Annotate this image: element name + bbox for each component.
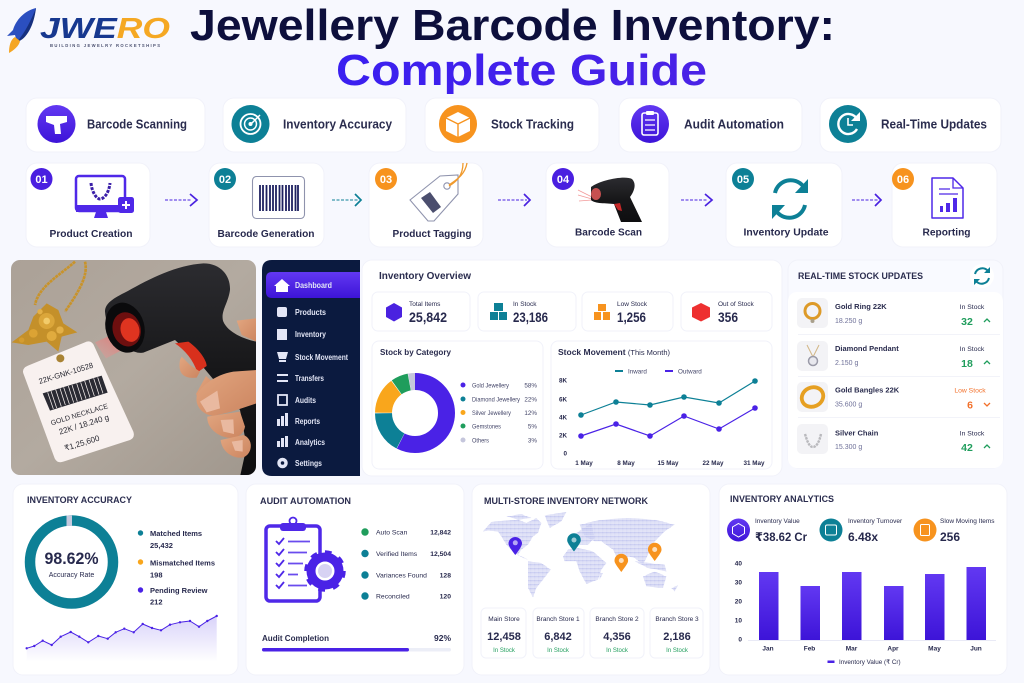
axis labels: 2K (559, 432, 567, 440)
y axis labels: 10 (735, 618, 742, 624)
fingers holding the grip (179, 357, 257, 458)
axis labels: 31 May (743, 460, 765, 467)
arrow (852, 194, 881, 206)
row: Silver Chain: In Stock (960, 430, 985, 438)
scanner lens (105, 302, 145, 353)
stat: Slow Moving Items (914, 518, 995, 544)
step 03: Product Tagging: Product Tagging (392, 228, 472, 240)
store: Branch Store 3 (650, 608, 703, 658)
hand-held scanner (100, 263, 257, 477)
pill: Inventory Accuracy (223, 98, 406, 152)
row: Diamond Pendant: In Stock (960, 346, 985, 353)
stat: Inventory Value: ₹38.62 Cr (755, 530, 807, 544)
pill: Real-Time Updates: Real-Time Updates (881, 118, 987, 132)
row: Gold Bangles 22K (797, 376, 1000, 412)
stat: Slow Moving Items: Slow Moving Items (940, 518, 995, 525)
store: Branch Store 1 (533, 608, 584, 658)
step 02: Barcode Generation: Barcode Generation (218, 228, 314, 240)
stat: Total Items: 25,842 (409, 310, 447, 325)
heading: Stock Movement (This Month) (558, 347, 671, 357)
step 05: Inventory Update: Inventory Update (744, 226, 829, 238)
step 06: Reporting (892, 163, 997, 247)
store: Branch Store 1: In Stock (547, 648, 570, 654)
heading: INVENTORY ANALYTICS (730, 494, 834, 504)
menu: Inventory (277, 329, 327, 340)
price tag (23, 341, 134, 462)
x axis labels: Jun (970, 646, 982, 652)
menu: Stock Movement (277, 352, 348, 362)
panel: stock movement chart (551, 341, 772, 469)
y axis labels: 20 (735, 598, 742, 606)
stat: Inventory Turnover (820, 518, 903, 544)
step 05: Inventory Update: 05 (737, 174, 749, 186)
brand tagline: BUILDING JEWELRY ROCKETSHIPS (50, 43, 160, 48)
photo: barcode scanner reading jewellery tag (11, 260, 257, 477)
donut legend (460, 382, 537, 444)
accuracy legend: Mismatched Items (150, 558, 215, 568)
row: Gold Bangles 22K: 6 (967, 400, 973, 412)
store: Branch Store 1: Branch Store 1 (536, 616, 580, 623)
row: Silver Chain: 15.300 g (835, 444, 862, 451)
scanner body (105, 263, 257, 477)
accuracy legend: 212 (150, 598, 163, 606)
step 01: Product Creation: Product Creation (50, 228, 132, 240)
step 03: Product Tagging: 03 (380, 174, 392, 186)
store: Branch Store 3: 2,186 (663, 631, 691, 643)
axis labels: 0 (563, 450, 567, 458)
row: Gold Ring 22K (797, 298, 990, 328)
row: Gold Bangles 22K: Gold Bangles 22K (835, 386, 900, 394)
active item: Dashboard: Dashboard (295, 281, 332, 290)
stat: Low Stock: Low Stock (617, 301, 648, 308)
accuracy ring: Accuracy Rate (49, 572, 94, 579)
y axis labels (735, 560, 742, 644)
audit list: 12,504 (430, 551, 451, 558)
menu: Stock Movement: Stock Movement (295, 353, 348, 362)
accuracy legend: 25,432 (150, 541, 173, 550)
store: Branch Store 2: Branch Store 2 (595, 616, 639, 623)
process steps row (26, 163, 997, 247)
pill: Real-Time Updates (820, 98, 1001, 152)
pill: Inventory Accuracy: Inventory Accuracy (283, 118, 392, 132)
arrow (332, 194, 361, 206)
chart legend: Inventory Value (₹ Cr) (839, 659, 901, 666)
row: Gold Bangles 22K: 35.600 g (835, 402, 862, 408)
x axis labels (762, 646, 982, 652)
heading: Inventory Overview (379, 270, 472, 282)
step 03: Product Tagging (369, 163, 483, 247)
row: Gold Bangles 22K: Low Stock (954, 388, 986, 394)
accuracy legend: Pending Review (150, 586, 208, 595)
title line 1: Jewellery Barcode Inventory: (190, 1, 835, 50)
audit list: Variances Found (376, 572, 427, 580)
donut legend: 3% (528, 438, 537, 444)
row: Silver Chain: 42 (961, 442, 973, 454)
heading: AUDIT AUTOMATION (260, 496, 351, 506)
stat: Out of Stock: Out of Stock (718, 301, 755, 308)
menu: Products: Products (295, 308, 327, 317)
axis labels: 8 May (617, 460, 635, 467)
pill: Barcode Scanning: Barcode Scanning (87, 118, 187, 132)
logo: JWERO (7, 8, 171, 53)
axis labels: 8K (559, 378, 567, 384)
step 04: Barcode Scan (546, 163, 669, 247)
panel: real-time stock updates (788, 260, 1003, 468)
row: Gold Ring 22K: In Stock (960, 304, 985, 311)
y axis labels: 30 (735, 580, 742, 586)
panel: audit automation (246, 484, 464, 675)
accuracy legend (138, 529, 215, 606)
pill: Audit Automation: Audit Automation (684, 118, 784, 132)
menu: Analytics: Analytics (295, 438, 326, 447)
audit list: Auto Scan (376, 530, 408, 536)
stat: Inventory Value (727, 518, 807, 544)
gold necklace chain (35, 262, 86, 312)
row: Gold Ring 22K: 18.250 g (835, 318, 862, 325)
panel: inventory analytics (719, 484, 1007, 675)
pill: Barcode Scanning (26, 98, 205, 152)
x axis labels: Jan (762, 646, 774, 652)
store: Branch Store 2 (590, 608, 644, 658)
stat: In Stock: 23,186 (513, 310, 548, 325)
x axis labels: Feb (804, 646, 815, 652)
audit list: 120 (440, 594, 451, 600)
active item: Dashboard (266, 272, 360, 298)
step 04: Barcode Scan: 04 (557, 174, 570, 186)
row: Gold Ring 22K: 32 (961, 316, 973, 328)
x axis labels: Mar (846, 646, 858, 652)
legend: Inward (628, 368, 647, 376)
audit completion progress: 92% (434, 633, 451, 643)
menu: Transfers (277, 374, 325, 383)
heading: REAL-TIME STOCK UPDATES (798, 271, 923, 281)
icon: refresh (970, 264, 994, 288)
store: Branch Store 2: 4,356 (603, 631, 631, 643)
row: Silver Chain: Silver Chain (835, 428, 879, 438)
price tag: 22K-GNK-10528 (38, 361, 94, 386)
x axis labels: May (928, 646, 941, 652)
store: Branch Store 3: In Stock (666, 648, 689, 654)
arrow (498, 194, 530, 206)
step 05: Inventory Update (726, 163, 842, 247)
axis labels: 4K (559, 414, 567, 422)
row: Diamond Pendant (797, 334, 1000, 371)
panel: inventory accuracy (13, 484, 238, 675)
y axis labels: 0 (738, 636, 742, 644)
audit completion progress (262, 633, 451, 652)
accuracy ring: 98.62% (44, 549, 98, 568)
store: Main Store: Main Store (488, 616, 520, 623)
bar chart (735, 560, 996, 666)
step 06: Reporting: Reporting (922, 226, 970, 238)
row: Silver Chain (797, 418, 1000, 454)
audit list: Verified Items (376, 551, 418, 558)
price tag: ₹1,25,600 (63, 434, 101, 453)
store: Branch Store 2: In Stock (606, 648, 629, 654)
thumb behind scanner (237, 318, 257, 342)
arrow (165, 194, 197, 206)
menu: Inventory: Inventory (295, 330, 327, 339)
store: Branch Store 1: 6,842 (544, 631, 572, 643)
store: Main Store: In Stock (493, 648, 516, 654)
accuracy legend: Matched Items (150, 529, 202, 538)
axis labels: 6K (559, 396, 567, 404)
brand name: JWE RO (40, 13, 171, 45)
fingernails (200, 391, 243, 452)
line: inward (578, 378, 758, 418)
heading: INVENTORY ACCURACY (27, 495, 132, 505)
x axis labels: Apr (887, 646, 899, 652)
donut legend: Gold Jewellery (472, 382, 510, 390)
audit list: 12,842 (430, 530, 451, 536)
menu: Transfers: Transfers (295, 374, 325, 383)
stat: Out of Stock (681, 292, 772, 331)
menu: Audits (278, 395, 317, 405)
donut legend: Gemstones (472, 424, 501, 430)
menu: Reports (277, 413, 321, 426)
icon: rocket (7, 8, 36, 53)
stat: Low Stock: 1,256 (617, 310, 646, 325)
audit list: Reconciled (376, 594, 410, 600)
sparkline (26, 615, 218, 662)
audit list (361, 528, 451, 600)
row: Diamond Pendant: 2.150 g (835, 360, 858, 367)
audit completion progress: Audit Completion (262, 634, 329, 643)
price tag: 22K / 18.240 g (58, 413, 110, 437)
arrow (681, 194, 712, 206)
donut legend: 12% (524, 410, 537, 417)
panel: multi-store network (472, 484, 710, 675)
axis labels: 15 May (657, 460, 679, 467)
stat: In Stock: In Stock (513, 301, 537, 308)
stat: Total Items (372, 292, 470, 331)
store: Main Store: 12,458 (487, 631, 521, 643)
pill: Audit Automation (619, 98, 802, 152)
axis labels (559, 378, 765, 467)
legend (615, 368, 702, 376)
stat: Inventory Value: Inventory Value (755, 518, 800, 525)
audit list: 128 (440, 572, 451, 580)
menu: Reports: Reports (295, 417, 321, 426)
title line 2: Complete Guide (336, 46, 707, 95)
donut legend: 22% (524, 396, 537, 404)
stat: Low Stock (582, 292, 673, 331)
step 04: Barcode Scan: Barcode Scan (575, 226, 642, 238)
store: Main Store (481, 608, 526, 658)
y axis labels: 40 (735, 560, 742, 568)
price tag: GOLD NECKLACE (50, 403, 109, 427)
stat: Inventory Turnover: Inventory Turnover (848, 518, 903, 525)
bars (759, 567, 986, 640)
step 02: Barcode Generation (209, 163, 324, 247)
dotted world map (483, 512, 678, 597)
axis labels: 1 May (575, 460, 593, 467)
accuracy legend: 198 (150, 570, 163, 580)
icon: clipboard with gear (266, 518, 344, 601)
menu: Audits: Audits (295, 396, 317, 405)
donut chart (371, 369, 459, 457)
stat: Total Items: Total Items (409, 301, 441, 308)
heading: MULTI-STORE INVENTORY NETWORK (484, 496, 648, 506)
panel: stock by category (371, 341, 543, 469)
menu: Settings: Settings (295, 459, 323, 468)
stat: Slow Moving Items: 256 (940, 530, 960, 544)
feature pills row (26, 98, 1001, 152)
panel: inventory overview (362, 260, 782, 476)
stat: Out of Stock: 356 (718, 310, 738, 325)
gold pendant (12, 303, 77, 352)
accuracy ring (30, 516, 113, 604)
row: Gold Ring 22K: Gold Ring 22K (835, 302, 887, 311)
menu: Analytics (277, 436, 326, 447)
line: outward (578, 405, 758, 439)
store: Branch Store 3: Branch Store 3 (655, 616, 699, 623)
row: Diamond Pendant: 18 (961, 358, 973, 370)
heading: Stock by Category (380, 347, 451, 357)
sidebar navigation (262, 260, 360, 476)
step 01: Product Creation: 01 (35, 174, 48, 186)
donut legend: Others (472, 438, 489, 444)
stat: Inventory Turnover: 6.48x (848, 530, 878, 544)
pill: Stock Tracking (425, 98, 599, 152)
donut legend: 58% (524, 382, 537, 390)
donut legend: 5% (528, 424, 537, 430)
title (190, 1, 835, 95)
donut legend: Silver Jewellery (472, 410, 512, 417)
step 01: Product Creation (26, 163, 150, 247)
legend: Outward (678, 368, 702, 376)
menu: Products (277, 307, 327, 317)
map pins (508, 533, 662, 572)
axis labels: 22 May (702, 460, 724, 467)
row: Diamond Pendant: Diamond Pendant (835, 344, 899, 353)
stat: In Stock (478, 292, 576, 331)
menu: Settings (279, 459, 323, 468)
step 06: Reporting: 06 (897, 174, 909, 186)
pill: Stock Tracking: Stock Tracking (491, 118, 574, 132)
donut legend: Diamond Jewellery (472, 396, 521, 404)
scanner trigger (175, 342, 207, 372)
laser beam (95, 336, 120, 358)
step 02: Barcode Generation: 02 (219, 174, 231, 186)
